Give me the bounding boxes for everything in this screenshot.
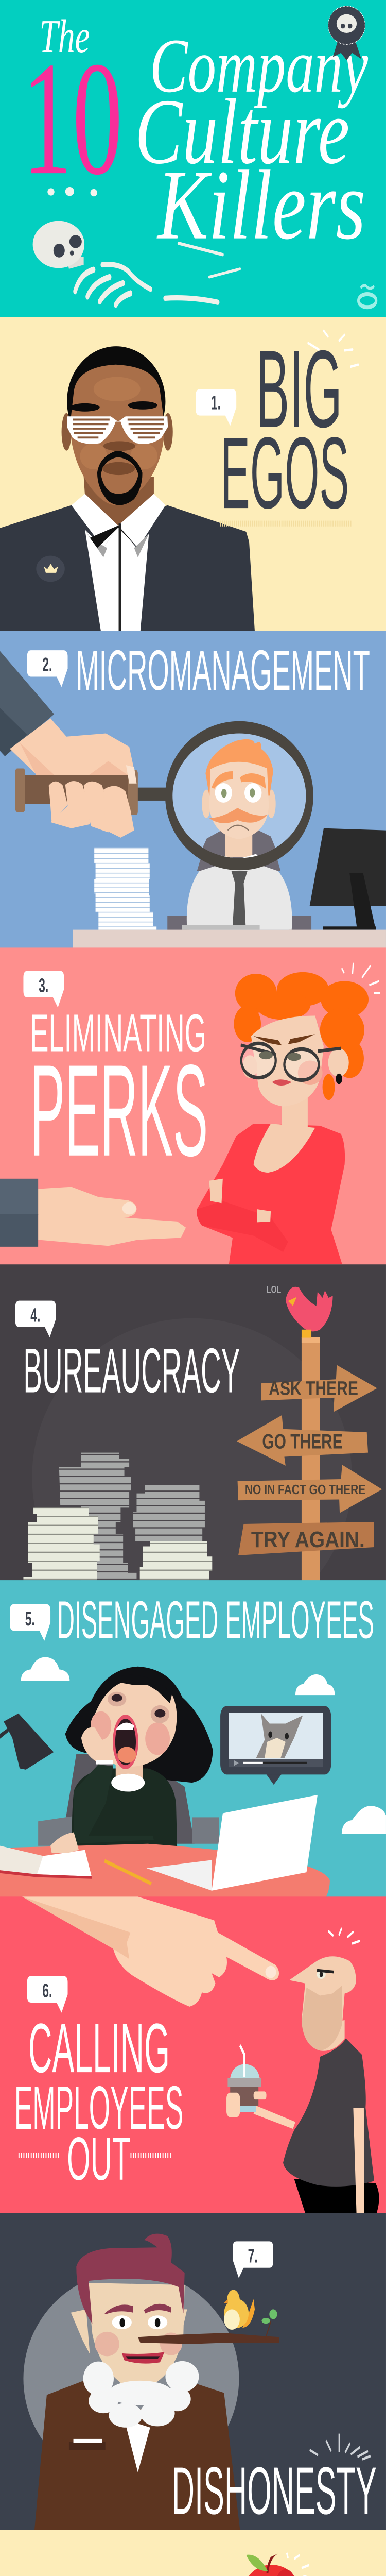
- illustration: yawning woman: [38, 1667, 219, 1856]
- number bubble 1: 1.: [211, 392, 221, 414]
- illustration: hand on book nails: [50, 1833, 79, 1853]
- illustration: bald man with drink: [226, 1956, 379, 2213]
- illustration: laughing bird: LOL: [267, 1285, 282, 1295]
- title: 10: 10: [22, 28, 122, 209]
- heading: calling employees out: OUT: [67, 2124, 130, 2193]
- three dots: [47, 187, 97, 196]
- illustration: angry red-haired woman: [197, 972, 369, 1264]
- illustration: signpost: GO THERE: [262, 1430, 343, 1453]
- number bubble 6: [27, 1976, 68, 2013]
- illustration: pointing hand: [22, 1896, 279, 2007]
- panel: 6 calling employees out: [0, 1896, 386, 2213]
- number bubble 4: 4.: [30, 1304, 40, 1326]
- illustration: apple: [244, 2554, 299, 2576]
- illustration: pencil: [104, 1861, 151, 1884]
- illustration: signpost: TRY AGAIN.: [251, 1527, 365, 1552]
- panel: 1 big egos: [0, 317, 386, 632]
- illustration: cat video tablet: [220, 1706, 331, 1785]
- number bubble 7: 7.: [248, 2245, 258, 2267]
- heading: eliminating perks: [30, 1004, 208, 1183]
- panel: header: [0, 0, 386, 318]
- heading: bureaucracy: BUREAUCRACY: [23, 1335, 240, 1406]
- title: The: The: [40, 11, 90, 63]
- number bubble 2: 2.: [42, 654, 52, 676]
- panel: 2 micromanagement: [0, 631, 386, 948]
- icon: sparkle: [310, 2434, 371, 2459]
- illustration: desk: [73, 930, 386, 948]
- illustration: laughing bird: [267, 1285, 333, 1338]
- illustration: computer monitor: [310, 828, 386, 930]
- icon: sparkle: [308, 331, 358, 367]
- number bubble 5: [10, 1604, 50, 1641]
- icon: clouds: [21, 1657, 386, 1834]
- illustration: signpost: ASK THERE: [269, 1377, 358, 1399]
- illustration: open hand: [0, 1179, 186, 1247]
- heading: big egos: [220, 328, 349, 530]
- illustration: signpost: [237, 1337, 382, 1581]
- icon: ribs and bones: [75, 243, 240, 305]
- icon: sparkle: [329, 1929, 359, 1943]
- title: Culture: Culture: [135, 79, 349, 183]
- title: Killers: Killers: [156, 149, 365, 260]
- illustration: hand holding magnifier: [0, 651, 138, 838]
- title: Company: Company: [150, 23, 369, 109]
- illustration: magnifying glass: [136, 727, 310, 864]
- number bubble 2: [27, 650, 68, 687]
- icon: sparkle: [287, 2553, 311, 2576]
- number bubble 4: [15, 1301, 56, 1337]
- illustration: man at desk under magnifier: [167, 727, 311, 930]
- illustration: laptop: [147, 1795, 318, 1891]
- number bubble 6: 6.: [42, 1980, 52, 2002]
- number bubble 1: [196, 389, 236, 426]
- heading: calling employees out: CALLING: [28, 2009, 170, 2087]
- heading: calling employees out: EMPLOYEES: [14, 2073, 183, 2142]
- number bubble 7: [233, 2241, 273, 2278]
- heading: big egos: BIG: [256, 328, 342, 451]
- illustration: stack of papers: [94, 848, 156, 930]
- icon: sparkle: [342, 963, 380, 993]
- illustration: open book: [0, 1846, 92, 1879]
- heading: eliminating perks: ELIMINATING: [30, 1004, 206, 1063]
- illustration: pinocchio man: [34, 2234, 279, 2530]
- icon: skull ribbon badge: [328, 6, 365, 60]
- panel: 4 bureaucracy: [0, 1264, 386, 1636]
- illustration: paper stacks: [23, 1453, 212, 1580]
- number bubble 3: 3.: [39, 975, 48, 996]
- panel: 5 disengaged employees: [0, 1580, 386, 1899]
- panel: 7 dishonesty: [0, 2213, 386, 2530]
- icon: officevibe logo: [358, 285, 376, 307]
- number bubble 3: [23, 971, 64, 1008]
- panel: 3 eliminating perks: [0, 947, 386, 1265]
- icon: desk lamp: [0, 1714, 54, 1770]
- illustration: yellow bird on branch: [223, 2290, 277, 2337]
- heading: eliminating perks: PERKS: [30, 1038, 208, 1183]
- illustration: signpost: NO IN FACT GO THERE: [245, 1482, 365, 1497]
- illustration: desk: [0, 1844, 330, 1899]
- heading: calling employees out: [14, 2009, 183, 2193]
- icon: skull: [33, 221, 84, 269]
- number bubble 5: 5.: [25, 1608, 35, 1630]
- panel: 8 lack of transparency: [0, 2530, 386, 2576]
- illustration: man in white shutter shades: [0, 346, 255, 632]
